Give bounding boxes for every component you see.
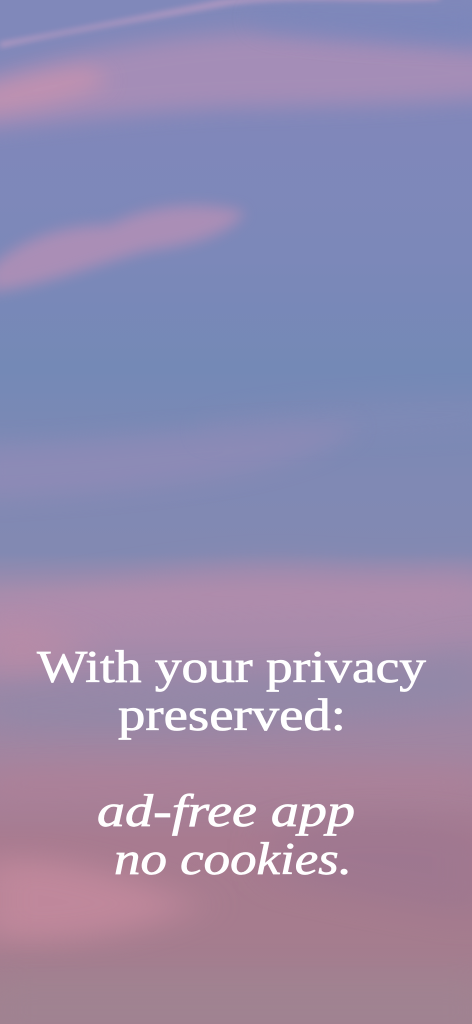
text: benefits list xyxy=(97,786,355,884)
heading: privacy statement xyxy=(37,642,427,740)
heading: privacy statement: preserved: xyxy=(118,690,346,740)
heading: privacy statement: With your privacy xyxy=(37,642,427,692)
text: benefits list: no cookies. xyxy=(114,834,352,884)
text: benefits list: ad-free app xyxy=(97,786,355,836)
